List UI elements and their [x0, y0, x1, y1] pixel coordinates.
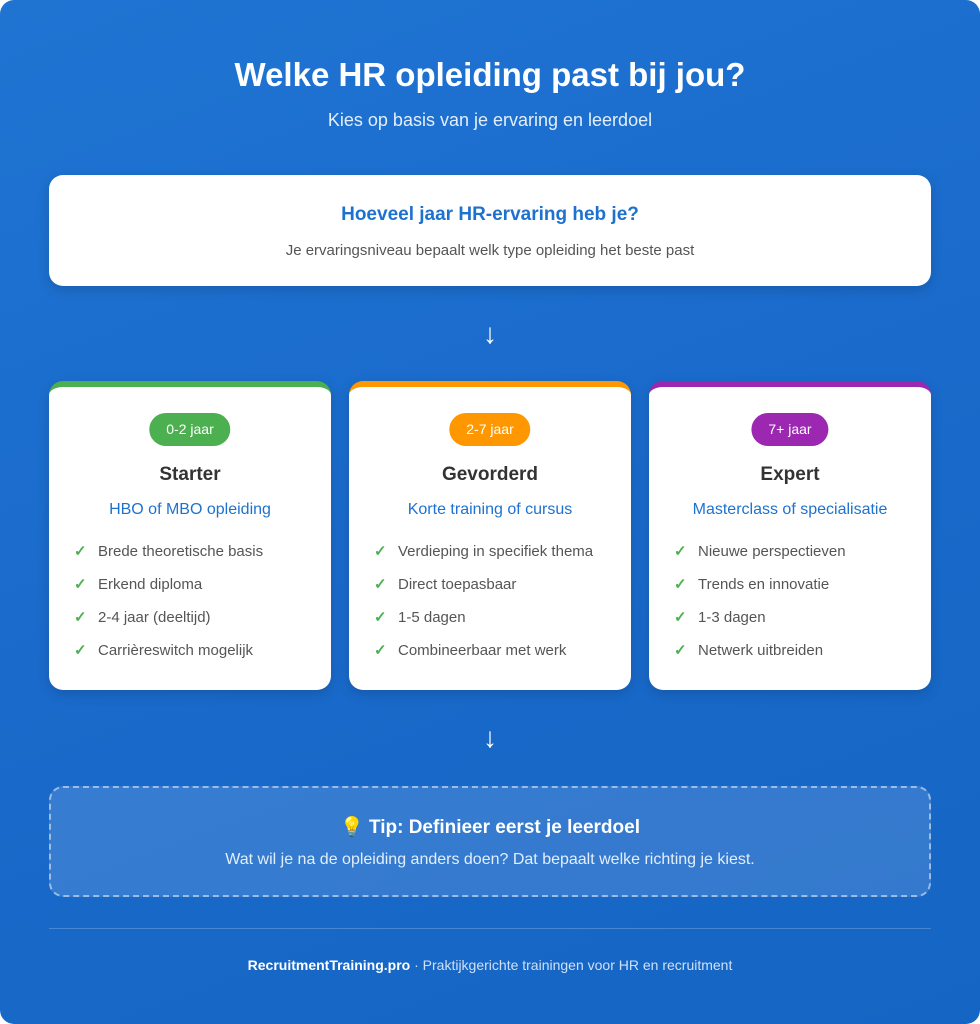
list: ✓: [374, 576, 387, 593]
list: Brede theoretische basis: [98, 543, 263, 560]
card subtitle: Masterclass of specialisatie: [693, 501, 887, 518]
card title: Starter: [159, 464, 221, 485]
card subtitle: HBO of MBO opleiding: [109, 501, 271, 518]
list: ✓: [74, 609, 87, 626]
list: Carrièreswitch mogelijk: [98, 642, 253, 659]
title: Welke HR opleiding past bij jou?: [235, 56, 745, 93]
list: ✓: [74, 543, 87, 560]
badge: [149, 413, 231, 446]
list: [674, 543, 846, 659]
list: ✓: [74, 642, 87, 659]
list: ✓: [674, 576, 687, 593]
panel: expert: [649, 381, 931, 690]
list: ✓: [374, 642, 387, 659]
list: ✓: [674, 543, 687, 560]
list: ✓: [674, 642, 687, 659]
list: 1-5 dagen: [398, 609, 466, 626]
badge: 7+ jaar: [768, 421, 812, 437]
panel: starter: [49, 381, 331, 690]
arrow: ↓: [483, 722, 497, 753]
list: Combineerbaar met werk: [398, 642, 566, 659]
arrow: ↓: [483, 318, 497, 349]
list: Netwerk uitbreiden: [698, 642, 823, 659]
question heading: Hoeveel jaar HR-ervaring heb je?: [341, 204, 639, 225]
list: 1-3 dagen: [698, 609, 766, 626]
card subtitle: Korte training of cursus: [408, 501, 572, 518]
tip text: Wat wil je na de opleiding anders doen? Dat bepaalt welke richting je kiest.: [225, 851, 755, 868]
badge: 0-2 jaar: [166, 421, 214, 437]
card title: Gevorderd: [442, 464, 538, 485]
badge: [449, 413, 531, 446]
list: Direct toepasbaar: [398, 576, 516, 593]
list: 2-4 jaar (deeltijd): [98, 609, 211, 626]
subtitle: Kies op basis van je ervaring en leerdoel: [328, 110, 652, 130]
list: [374, 543, 594, 659]
list: Verdieping in specifiek thema: [398, 543, 593, 560]
list: Nieuwe perspectieven: [698, 543, 846, 560]
list: ✓: [74, 576, 87, 593]
list: ✓: [374, 543, 387, 560]
tip heading: 💡 Tip: Definieer eerst je leerdoel: [340, 817, 640, 838]
panel: question: [49, 175, 931, 286]
badge: [751, 413, 829, 446]
list: Trends en innovatie: [698, 576, 829, 593]
list: [74, 543, 263, 659]
question text: Je ervaringsniveau bepaalt welk type opleiding het beste past: [286, 242, 694, 259]
list: ✓: [374, 609, 387, 626]
badge: 2-7 jaar: [466, 421, 514, 437]
footer: RecruitmentTraining.pro · Praktijkgerichte trainingen voor HR en recruitment: [248, 957, 732, 973]
list: ✓: [674, 609, 687, 626]
panel: gevorderd: [349, 381, 631, 690]
callout: tip: [49, 786, 931, 897]
card title: Expert: [760, 464, 820, 485]
list: Erkend diploma: [98, 576, 202, 593]
